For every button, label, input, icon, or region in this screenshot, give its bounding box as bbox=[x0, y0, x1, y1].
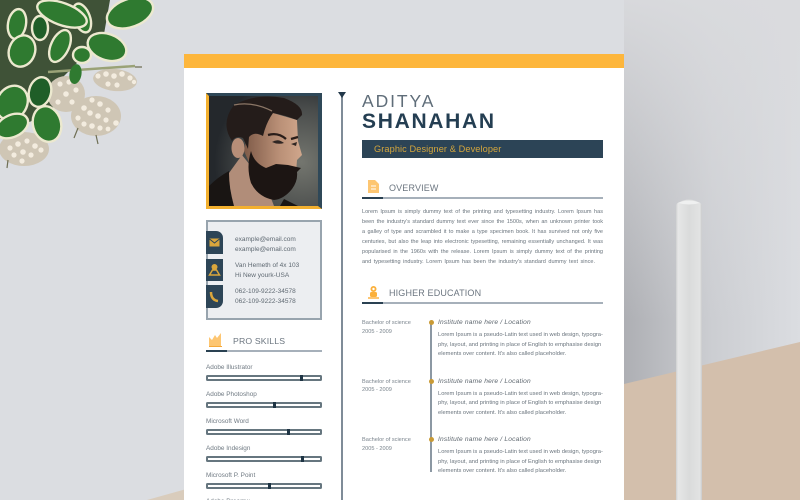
overview paragraph: popularised in the 1960s with the release. Lorem Ipsum is simply dummy text of the printing bbox=[362, 249, 603, 255]
education timeline line bbox=[430, 321, 432, 472]
overview heading bbox=[362, 180, 603, 199]
skill: word: Microsoft Word bbox=[206, 418, 249, 425]
education entry 3: Bachelor of science bbox=[362, 437, 411, 443]
profile photo bbox=[206, 93, 322, 209]
divider arrowhead bbox=[338, 92, 346, 98]
flower clusters bbox=[0, 67, 138, 166]
jacket bbox=[209, 171, 234, 206]
resume sheet bbox=[184, 54, 624, 500]
icon: document bbox=[368, 180, 379, 193]
education entry 1: Institute name here / Location bbox=[438, 319, 531, 326]
skill: powerpoint: Microsoft P. Point bbox=[206, 472, 255, 479]
pro skills heading: PRO SKILLS bbox=[233, 336, 285, 346]
education entry 3: 2005 - 2009 bbox=[362, 446, 392, 452]
plant decoration bbox=[0, 0, 154, 168]
vertical divider bbox=[341, 94, 343, 500]
eyebrow and eye bbox=[268, 134, 298, 139]
education entry 1: elements over content. It's also called placeholder. bbox=[438, 351, 566, 357]
overview heading: OVERVIEW bbox=[389, 183, 439, 193]
education entry 2: Bachelor of science bbox=[362, 378, 411, 384]
education entry 2: 2005 - 2009 bbox=[362, 387, 392, 393]
icon: graduate bbox=[368, 286, 379, 299]
job title banner bbox=[362, 140, 603, 158]
education entry 2: elements over content. It's also called placeholder. bbox=[438, 410, 566, 416]
overview paragraph bbox=[362, 208, 603, 265]
icon tab: phone bbox=[206, 285, 223, 308]
skill bars bbox=[206, 364, 322, 500]
pro skills heading bbox=[206, 333, 322, 352]
education entry 3: Lorem Ipsum is a pseudo-Latin text used in web design, typogra- bbox=[438, 449, 603, 455]
education entry 3: elements over content. It's also called placeholder. bbox=[438, 468, 566, 474]
education entry 2: Lorem Ipsum is a pseudo-Latin text used in web design, typogra- bbox=[438, 390, 603, 396]
contact text bbox=[235, 236, 299, 305]
contact text: example@email.com bbox=[235, 236, 296, 243]
education entry 1: Lorem Ipsum is a pseudo-Latin text used in web design, typogra- bbox=[438, 332, 603, 338]
hair bbox=[226, 97, 302, 149]
icon tab: address bbox=[206, 259, 223, 281]
pole bbox=[676, 200, 702, 500]
icon: chart bbox=[209, 333, 222, 347]
skill: indesign: Adobe Indesign bbox=[206, 445, 250, 452]
education entry 1: 2005 - 2009 bbox=[362, 328, 392, 334]
skill: photoshop: Adobe Photoshop bbox=[206, 391, 257, 398]
education entry 3 bbox=[362, 436, 603, 474]
contact text: example@email.com bbox=[235, 246, 296, 253]
contact text: 062-109-9222-34578 bbox=[235, 288, 296, 295]
top accent bar bbox=[184, 54, 624, 68]
name: last: SHANAHAN bbox=[362, 110, 496, 133]
icon tab: email bbox=[206, 231, 223, 254]
job title banner: Graphic Designer & Developer bbox=[374, 144, 501, 154]
contact text: Van Hemeth of 4x 103 bbox=[235, 262, 299, 269]
education entry 2 bbox=[362, 378, 603, 416]
education entry 1: Bachelor of science bbox=[362, 320, 411, 326]
face bbox=[244, 113, 302, 178]
timeline dot 1 bbox=[428, 320, 434, 325]
contact text: Hi New yourk-USA bbox=[235, 272, 289, 279]
education entry 2: phy, layout, and printing in place of English to emphasise design bbox=[438, 400, 601, 406]
contact text: 062-109-9222-34578 bbox=[235, 298, 296, 305]
timeline dot 2 bbox=[428, 379, 434, 384]
overview paragraph: been the industry's standard dummy text ever since the 1500s, when an unknown printer took bbox=[362, 219, 603, 225]
overview paragraph: centuries, but also the leap into electronic typesetting, remaining essentially unchanged. It was bbox=[362, 239, 603, 245]
leaves bbox=[0, 0, 157, 145]
education entry 1 bbox=[362, 319, 603, 357]
ear bbox=[232, 138, 244, 158]
contact panel bbox=[206, 220, 322, 320]
education entry 3: phy, layout, and printing in place of English to emphasise design bbox=[438, 459, 601, 465]
timeline dot 3 bbox=[428, 437, 434, 442]
tan surface bbox=[624, 342, 800, 500]
higher education heading: HIGHER EDUCATION bbox=[389, 288, 481, 298]
skill: illustrator: Adobe Illustrator bbox=[206, 364, 253, 371]
education entry 2: Institute name here / Location bbox=[438, 378, 531, 384]
name: first: ADITYA bbox=[362, 91, 435, 111]
neck bbox=[229, 155, 274, 206]
beard bbox=[248, 151, 301, 200]
education entry 1: phy, layout, and printing in place of English to emphasise design bbox=[438, 342, 601, 348]
overview paragraph: a galley of type and scrambled it to make a type specimen book. It has survived not only five bbox=[362, 229, 603, 235]
higher education heading bbox=[362, 286, 603, 304]
education entry 3: Institute name here / Location bbox=[438, 436, 531, 443]
overview paragraph: Lorem Ipsum is simply dummy text of the printing and typesetting industry. Lorem Ipsum has bbox=[362, 208, 603, 214]
overview paragraph: and typesetting industry. Lorem Ipsum has been the industry's standard dummy text since. bbox=[362, 259, 595, 265]
